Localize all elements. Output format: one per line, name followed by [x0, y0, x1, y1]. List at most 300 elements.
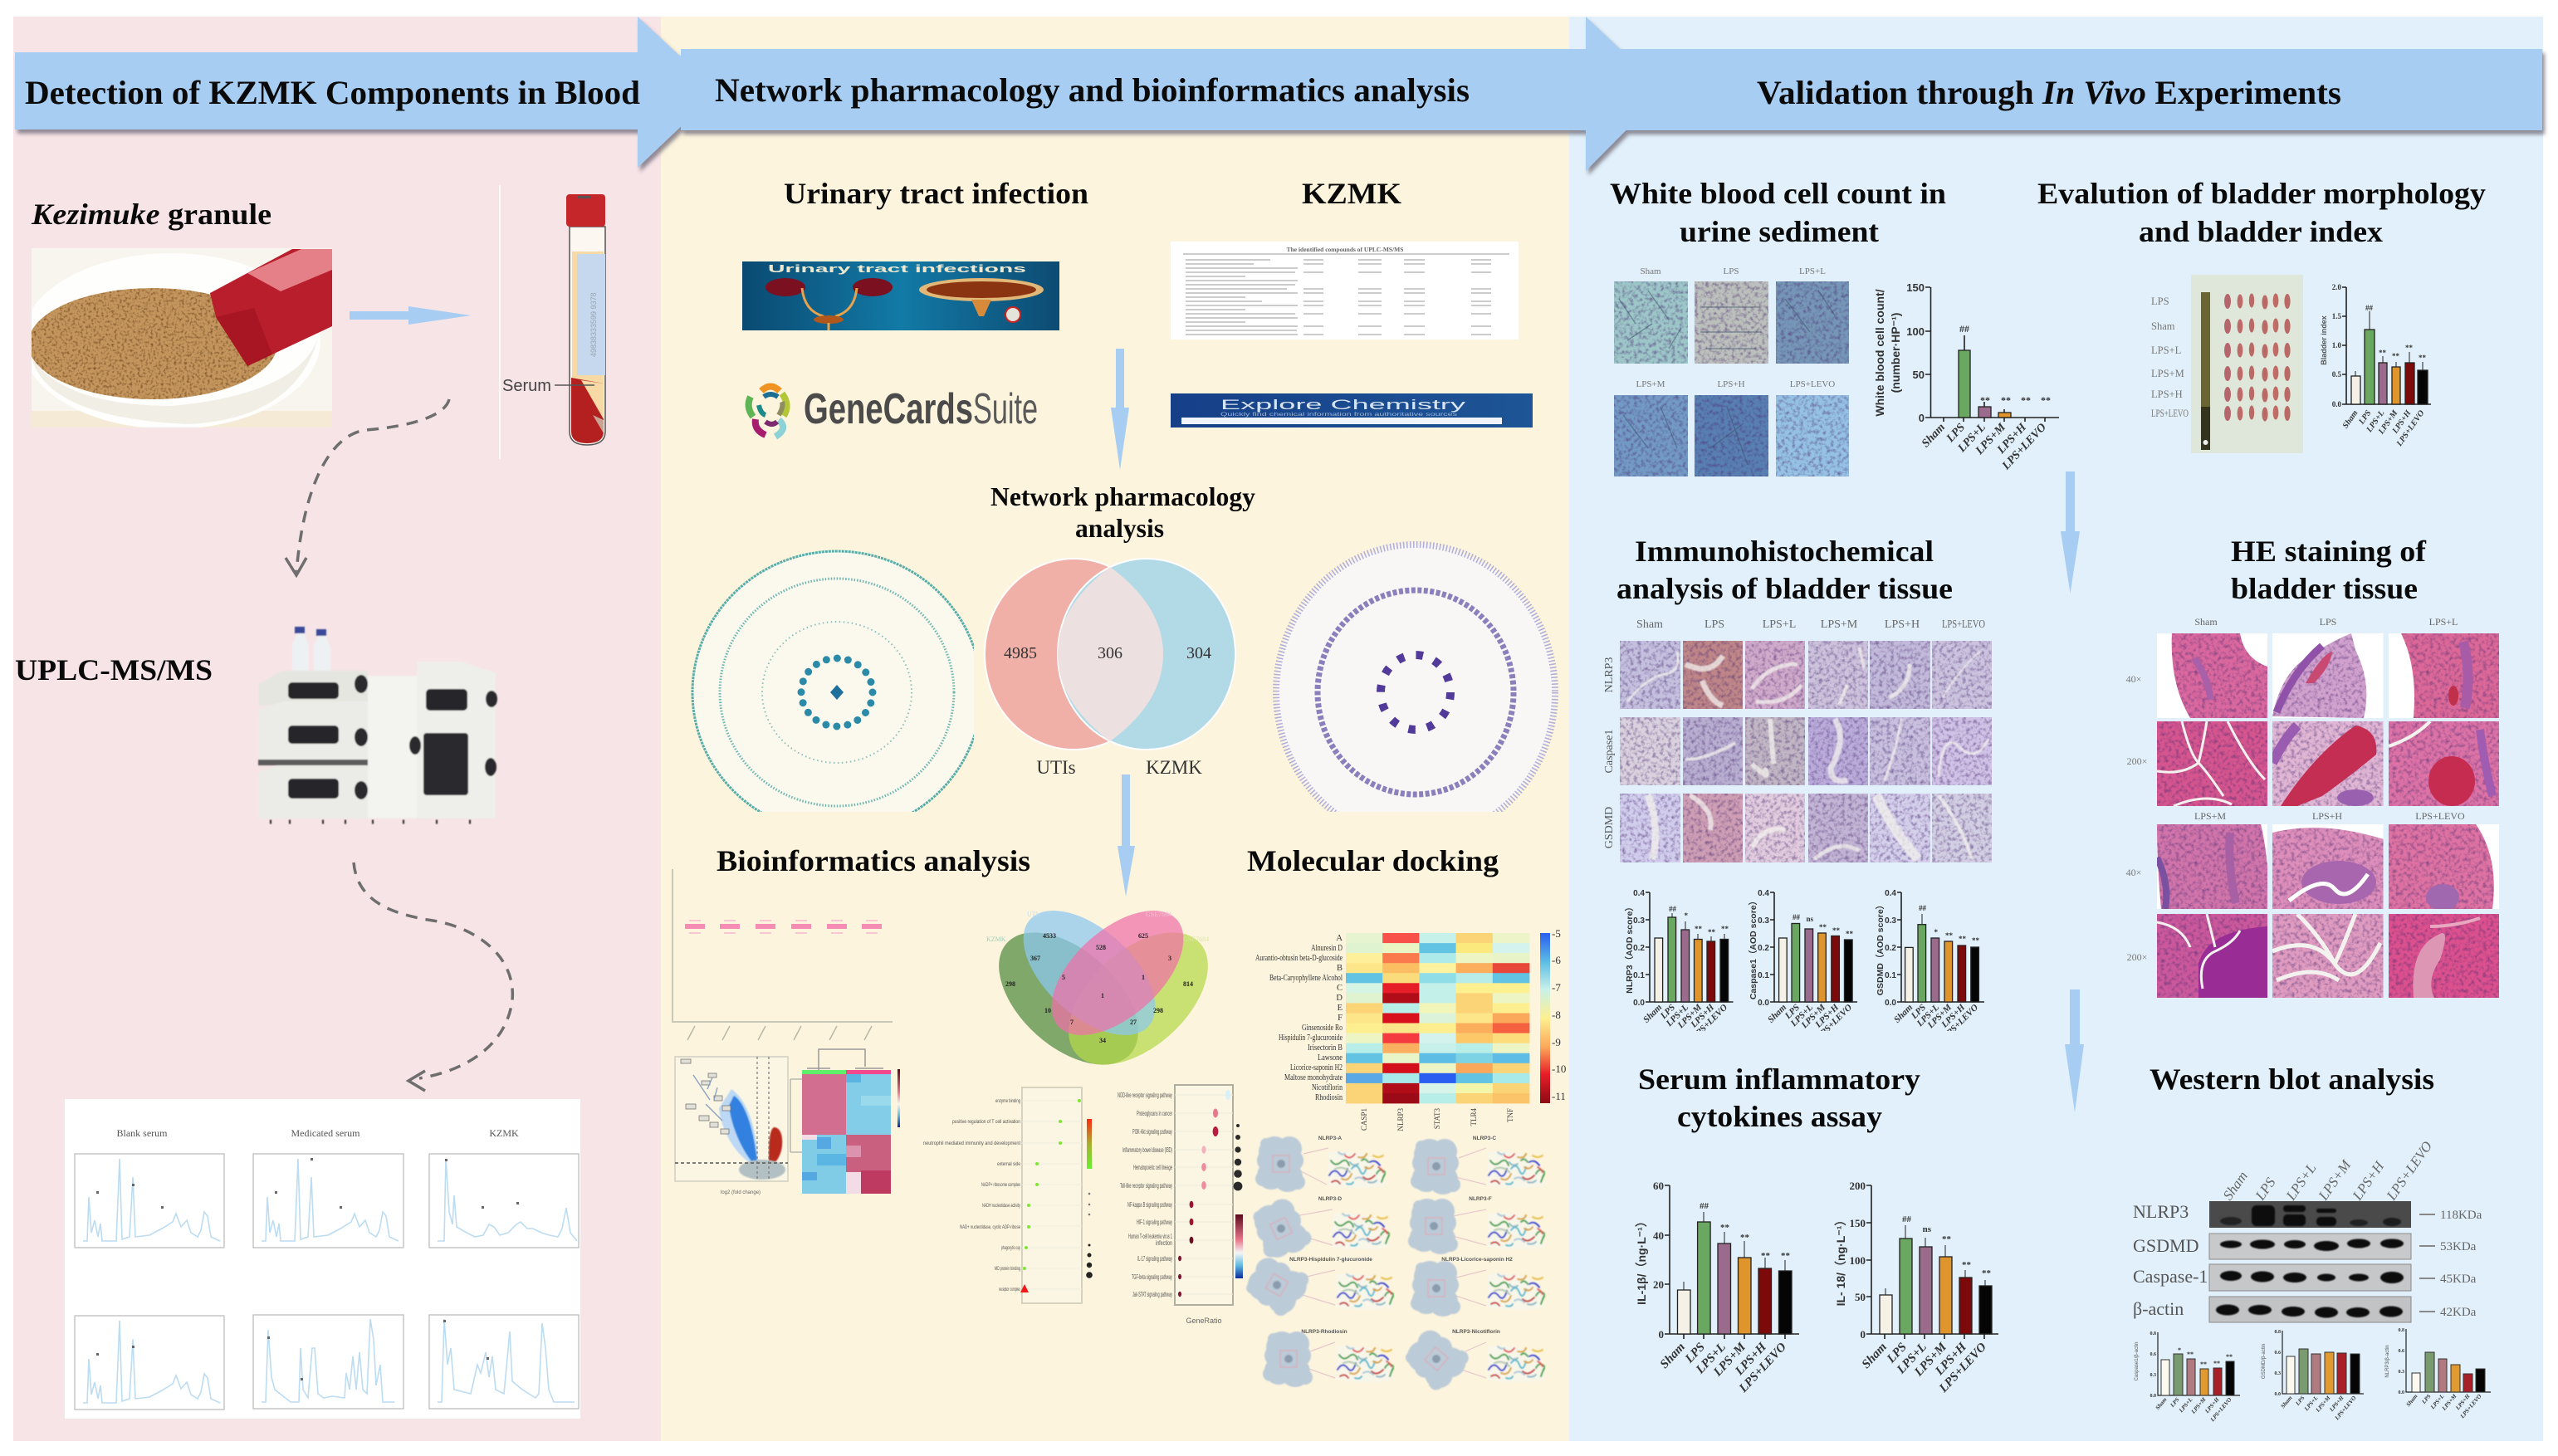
chart: IL-18 concentration: LPS+M — [1911, 1340, 1949, 1380]
chart: Caspase1 AOD score: ## — [1793, 913, 1800, 921]
chart: GSDMD AOD score: * — [1934, 928, 1938, 936]
chart: molecular docking binding energy heatmap: -7 — [1552, 981, 1561, 994]
chart: KEGG enrichment dot plot: Human T-cell leukemia virus 1 — [1128, 1232, 1172, 1240]
micrograph grid: HE staining: 200× — [2127, 951, 2147, 963]
chart: KEGG enrichment dot plot: NF-kappa B signaling pathway — [1127, 1200, 1172, 1209]
chart: NLRP3 AOD score: 0.1 — [1633, 971, 1645, 980]
micrograph grid: immunohistochemistry: LPS+L — [1763, 618, 1796, 631]
chart: molecular docking binding energy heatmap: Lawsone — [1318, 1053, 1343, 1063]
chart: differential expression heatmap — [790, 1049, 900, 1194]
chart: molecular docking binding energy heatmap: Alnuresin D — [1311, 944, 1343, 953]
micrograph grid: immunohistochemistry: LPS — [1705, 618, 1724, 631]
figure: western blot bands: 42KDa — [2440, 1306, 2477, 1319]
venn diagram: four-set overlap: 5 — [1062, 974, 1065, 981]
chart: bladder index bars: LPS+L — [2365, 408, 2386, 435]
venn diagram: four-set overlap: GSE7684 — [1183, 936, 1209, 943]
chart: IL-18 concentration: LPS+LEVO — [1936, 1341, 1989, 1395]
chart: IL-1β concentration: Sham — [1658, 1341, 1688, 1371]
chart: KEGG enrichment dot plot: Hematopoietic cell lineage — [1133, 1163, 1172, 1171]
micrographs: urine sediment — [1614, 266, 1849, 476]
chart: molecular docking binding energy heatmap: Aurantio-obtusin beta-D-glucoside — [1255, 954, 1343, 963]
image: urinary tract infections poster: Urinary tract infections — [768, 262, 1026, 275]
chart: western blot quantification, GSDMD: 0.8 — [2275, 1330, 2281, 1335]
chart: white blood cell count bars: LPS+LEVO — [1999, 421, 2049, 473]
chromatogram title: blank serum: Blank serum — [116, 1127, 168, 1139]
title: detection of KZMK components: Detection of KZMK Components in Blood — [25, 74, 640, 111]
chart: bladder index bars: 2.0 — [2332, 283, 2341, 291]
network: left teal concentric compound-target graph — [691, 550, 974, 812]
heading: HE staining: bladder tissue — [2231, 572, 2418, 605]
chart: western blot quantification, GSDMD: LPS — [2294, 1395, 2306, 1408]
image: table of identified compounds — [1171, 242, 1519, 340]
chart: bladder index bars: LPS+LEVO — [2394, 408, 2426, 449]
heading: serum inflammatory cytokines assay: cytokines assay — [1677, 1100, 1882, 1133]
image: table of identified compounds: The identified compounds of UPLC-MS/MS — [1287, 246, 1403, 253]
venn diagram: four-set overlap: 1 — [1142, 974, 1145, 981]
venn diagram: four-set overlap: 34 — [1099, 1037, 1106, 1044]
heading: KZMK: KZMK — [1302, 177, 1401, 210]
chart: IL-18 concentration: Sham — [1860, 1341, 1890, 1371]
chart: IL-18 concentration: LPS+H — [1933, 1340, 1970, 1379]
micrograph grid: immunohistochemistry: Sham — [1636, 618, 1663, 631]
micrograph grid: HE staining: LPS — [2320, 616, 2336, 628]
chart: western blot quantification, NLRP3 — [2385, 1328, 2491, 1420]
chart: molecular docking binding energy heatmap: -8 — [1552, 1009, 1561, 1021]
chart: IL-18 concentration: ## — [1902, 1214, 1911, 1224]
header arrows — [15, 17, 2545, 175]
chart: NLRP3 AOD score — [1624, 889, 1734, 1008]
venn diagram: four-set overlap: 367 — [1030, 955, 1040, 962]
chart: western blot quantification, GSDMD: LPS+H — [2328, 1395, 2345, 1414]
chart: GSDMD AOD score: ** — [1959, 935, 1966, 943]
axis labels: IHC group names: LPS+H — [1689, 1002, 1716, 1030]
chart: Caspase1 AOD score — [1748, 889, 1857, 1008]
chart: NLRP3 AOD score: 0.0 — [1633, 999, 1645, 1008]
heading: molecular docking: Molecular docking — [1247, 844, 1499, 877]
venn diagram: four-set overlap: 298 — [1153, 1007, 1163, 1014]
chart: western blot quantification, GSDMD: LPS+M — [2314, 1395, 2332, 1414]
axis labels: IHC group names: LPS+LEVO — [1814, 1003, 1854, 1043]
chart: western blot quantification, Caspase-1: LPS — [2169, 1396, 2181, 1410]
chart: normalized expression box plot — [673, 869, 893, 1040]
arrow: down from top row of validation — [2061, 471, 2080, 594]
chart: white blood cell count bars: Sham — [1920, 421, 1948, 450]
heading: immunohistochemical analysis — [1616, 535, 1953, 605]
chart: white blood cell count bars: LPS+M — [1973, 421, 2008, 458]
chart: Caspase1 AOD score: ** — [1819, 923, 1827, 931]
chart: NLRP3 AOD score: ** — [1708, 928, 1715, 936]
chart: western blot quantification, NLRP3: 0.6 — [2398, 1349, 2404, 1354]
chart: NLRP3 AOD score: ** — [1721, 925, 1729, 933]
chart: bladder index bars: LPS+M — [2376, 408, 2400, 437]
chart: NLRP3 AOD score: 0.3 — [1633, 916, 1645, 926]
chart: IL-18 concentration: ** — [1962, 1260, 1971, 1270]
chart: KEGG enrichment dot plot: Toll-like receptor signaling pathway — [1120, 1181, 1172, 1190]
chart: western blot quantification, NLRP3: 0.8 — [2398, 1328, 2404, 1333]
chart: western blot quantification, Caspase-1: * — [2178, 1346, 2181, 1354]
chart: GSDMD AOD score: 0.3 — [1885, 916, 1896, 926]
image: explore chemistry banner — [1171, 393, 1533, 428]
chart: white blood cell count bars: ** — [2041, 394, 2051, 406]
chart: molecular docking binding energy heatmap: -11 — [1552, 1090, 1566, 1102]
chart: western blot quantification, GSDMD: 0.6 — [2275, 1351, 2281, 1356]
figure: western blot bands: 53KDa — [2440, 1240, 2477, 1253]
arrow: down to bottom row of validation — [2065, 989, 2084, 1112]
chart: western blot quantification, Caspase-1: Sham — [2154, 1396, 2169, 1411]
chart: NLRP3 AOD score: 0.4 — [1633, 889, 1645, 898]
axis labels: IHC group names: Sham — [1892, 1002, 1915, 1025]
axis labels: IHC group names: Sham — [1766, 1002, 1788, 1025]
venn diagram: four-set overlap: 4533 — [1043, 932, 1056, 940]
chart: western blot quantification, GSDMD: GSDMD/β-actin — [2262, 1344, 2267, 1379]
chart: white blood cell count bars: LPS+H — [1994, 421, 2030, 457]
chart group: chromatograms — [65, 1099, 580, 1419]
chart: KEGG enrichment dot plot: Jak-STAT signaling pathway — [1132, 1290, 1172, 1298]
image: explore chemistry banner: Explore Chemistry — [1220, 397, 1466, 413]
network: right purple concentric compound-target graph — [1273, 541, 1558, 812]
heading: serum inflammatory cytokines assay: Serum inflammatory — [1638, 1063, 1920, 1096]
chart: molecular docking binding energy heatmap: Licorice-saponin H2 — [1290, 1063, 1343, 1072]
chart: western blot quantification, Caspase-1: ** — [2213, 1360, 2220, 1367]
venn diagram: UTIs and KZMK — [985, 559, 1235, 778]
heading: bioinformatics analysis: Bioinformatics analysis — [717, 844, 1030, 877]
photo: excised bladder specimens: LPS+LEVO — [2151, 408, 2189, 419]
chart: white blood cell count bars: (number·HP⁻¹) — [1889, 313, 1902, 393]
chart: GSDMD AOD score: 0.4 — [1885, 889, 1896, 898]
axis labels: IHC group names: LPS+H — [1939, 1002, 1967, 1030]
chart: KEGG enrichment dot plot: NOD-like receptor signaling pathway — [1118, 1091, 1172, 1099]
chart: GO enrichment dot plot: phagocytic cup — [1001, 1245, 1020, 1251]
micrograph grid: HE staining: 200× — [2127, 755, 2147, 767]
figure: western blot bands: β-actin — [2133, 1298, 2184, 1319]
micrographs: urine sediment: LPS+L — [1799, 266, 1826, 276]
chart: white blood cell count bars: 0 — [1919, 412, 1925, 424]
chart: molecular docking binding energy heatmap: Nicotiflorin — [1312, 1083, 1343, 1092]
chart: bladder index bars: Bladder index — [2320, 315, 2328, 365]
venn diagram: four-set overlap: 1 — [1101, 992, 1104, 999]
chart: molecular docking binding energy heatmap: Maltose monohydrate — [1284, 1073, 1343, 1082]
heading: network pharmacology analysis — [990, 481, 1255, 543]
chart: IL-18 concentration: 50 — [1855, 1291, 1866, 1303]
chart: molecular docking binding energy heatmap: A — [1336, 934, 1343, 943]
chart: western blot quantification, Caspase-1: LPS+H — [2203, 1396, 2221, 1415]
chart: bladder index bars: 0.5 — [2332, 370, 2341, 379]
chart: KEGG enrichment dot plot: TGF-beta signaling pathway — [1132, 1273, 1172, 1281]
chart: Caspase1 AOD score: 0.0 — [1758, 999, 1769, 1008]
axis labels: IHC group names: LPS+L — [1915, 1002, 1941, 1029]
venn diagram: four-set overlap: UTIs — [1027, 911, 1040, 918]
figure: western blot bands: Caspase-1 — [2133, 1266, 2208, 1287]
venn diagram: four-set overlap: 298 — [1005, 980, 1015, 988]
chart: KEGG enrichment dot plot — [1118, 1085, 1243, 1325]
axis labels: IHC group names: LPS+M — [1799, 1002, 1828, 1031]
micrograph grid: HE staining: 40× — [2126, 673, 2141, 685]
micrograph grid: immunohistochemistry — [1603, 618, 1992, 862]
chart: IL-1β concentration: 40 — [1653, 1229, 1664, 1242]
heading: bladder morphology and index: Evalution of bladder morphology — [2037, 177, 2486, 210]
micrograph grid: immunohistochemistry: Caspase1 — [1603, 730, 1616, 773]
venn diagram: four-set overlap: GSE7684 — [1146, 911, 1171, 918]
chart: white blood cell count bars: ## — [1959, 323, 1969, 335]
chart: white blood cell count bars: ** — [1980, 394, 1990, 406]
venn diagram: four-set overlap: 10 — [1044, 1007, 1051, 1014]
chart: GSDMD AOD score: ## — [1919, 904, 1926, 912]
figure: western blot bands — [2133, 1138, 2482, 1322]
venn diagram: four-set overlap: 528 — [1096, 944, 1106, 951]
chart: western blot quantification, Caspase-1 — [2135, 1331, 2240, 1424]
venn diagram: four-set overlap — [975, 887, 1232, 1090]
figure group: NLRP3 docking poses: NLRP3-Licorice-saponin H2 — [1441, 1257, 1513, 1263]
chart: IL-18 concentration: LPS — [1884, 1341, 1910, 1366]
venn diagram: four-set overlap: KZMK — [986, 936, 1006, 943]
chart: molecular docking binding energy heatmap: Beta-Caryophyllene Alcohol — [1269, 974, 1343, 983]
axis labels: IHC group names: LPS — [1783, 1003, 1802, 1022]
figure: western blot bands: LPS+H — [2349, 1157, 2388, 1204]
chart: GO enrichment dot plot: external side — [997, 1161, 1020, 1167]
axis labels: IHC group names: Sham — [1641, 1002, 1664, 1025]
venn diagram: four-set overlap: 3 — [1168, 955, 1171, 962]
arrow: dashed, tube to UPLC — [286, 399, 449, 575]
chart: western blot quantification, Caspase-1: ** — [2187, 1351, 2194, 1358]
heading: serum inflammatory cytokines assay — [1638, 1063, 1920, 1133]
heading: network pharmacology analysis: Network pharmacology — [990, 481, 1255, 511]
chart: Caspase1 AOD score: 0.3 — [1758, 916, 1769, 926]
chart: bladder index bars: Sham — [2341, 408, 2360, 430]
figure: western blot bands: GSDMD — [2133, 1235, 2199, 1256]
chart: western blot quantification, NLRP3: Sham — [2405, 1393, 2419, 1408]
chart: white blood cell count bars: LPS+L — [1955, 421, 1988, 456]
chart: molecular docking binding energy heatmap: CASP1 — [1360, 1108, 1368, 1131]
chart: molecular docking binding energy heatmap: Irisectorin B — [1308, 1043, 1343, 1053]
chart: KEGG enrichment dot plot: Proteoglycans in cancer — [1137, 1109, 1172, 1117]
venn diagram: four-set overlap: 27 — [1130, 1019, 1137, 1026]
chart: Caspase1 AOD score: ns — [1806, 915, 1813, 923]
axis labels: IHC group names: LPS+L — [1664, 1002, 1690, 1029]
chart: IL-1β concentration: ** — [1740, 1233, 1750, 1243]
figure: western blot bands: 118KDa — [2440, 1209, 2482, 1222]
arrow: dashed, UPLC to chromatograms — [354, 862, 512, 1091]
venn diagram: UTIs and KZMK: UTIs — [1036, 757, 1076, 778]
chart: molecular docking binding energy heatmap: Ginsenoside Ro — [1302, 1024, 1343, 1033]
panel: blood component detection background — [13, 17, 661, 1441]
illustration: UPLC-MS/MS instrument — [258, 627, 497, 822]
chart: bladder index bars: LPS+H — [2390, 408, 2414, 436]
chart: IL-1β concentration: 60 — [1653, 1180, 1664, 1192]
chart: western blot quantification, NLRP3: LPS+L — [2428, 1393, 2446, 1411]
chart: Caspase1 AOD score: ** — [1832, 926, 1840, 935]
heading: white blood cell count: White blood cell count in — [1610, 177, 1946, 210]
micrographs: urine sediment: LPS+H — [1717, 379, 1745, 389]
icon: blood collection tube with serum label — [499, 185, 605, 459]
figure: western blot bands: LPS+M — [2315, 1156, 2355, 1204]
heading: HE staining: HE staining of — [2231, 535, 2427, 568]
chart: western blot quantification, Caspase-1: 0.6 — [2150, 1352, 2156, 1357]
chart: IL-1β concentration: IL-1β/（ng·L⁻¹） — [1635, 1215, 1648, 1305]
chart: IL-1β concentration: 20 — [1653, 1278, 1664, 1291]
micrograph grid: immunohistochemistry: LPS+M — [1821, 618, 1858, 631]
chart: molecular docking binding energy heatmap: F — [1338, 1014, 1343, 1023]
chart: molecular docking binding energy heatmap: D — [1336, 994, 1343, 1003]
chart: molecular docking binding energy heatmap: Hispidulin 7-glucuronide — [1279, 1033, 1343, 1043]
chart: GO enrichment dot plot: NAD+ nucleotidase, cyclic ADP-ribose — [960, 1224, 1020, 1230]
micrograph grid: immunohistochemistry: LPS+LEVO — [1942, 618, 1985, 631]
chart: IL-1β concentration: LPS+H — [1733, 1340, 1770, 1379]
chart: bladder index bars: 1.5 — [2332, 312, 2341, 320]
chart: bladder index bars — [2320, 283, 2431, 449]
chart: white blood cell count bars: LPS — [1944, 421, 1968, 446]
chart: GSDMD AOD score: 0.0 — [1885, 999, 1896, 1008]
chart: NLRP3 AOD score: ** — [1695, 925, 1702, 933]
heading: Kezimuke granule: Kezimuke granule — [31, 198, 271, 231]
chart: western blot quantification, Caspase-1: ** — [2200, 1361, 2207, 1368]
icon: blood collection tube with serum label: 49838333599 9378 — [589, 292, 598, 357]
chart: IL-18 concentration: ** — [1982, 1268, 1991, 1278]
chart: western blot quantification, GSDMD: 0.3 — [2275, 1371, 2281, 1376]
chart: NLRP3 AOD score: ## — [1669, 905, 1677, 913]
figure group: NLRP3 docking poses — [1240, 1136, 1544, 1397]
venn diagram: UTIs and KZMK: 4985 — [1004, 644, 1037, 662]
figure: western blot bands: LPS+L — [2282, 1160, 2320, 1204]
chart: GSDMD AOD score: 0.1 — [1885, 971, 1896, 980]
chart: bladder index bars: ** — [2419, 354, 2426, 362]
axis labels: IHC group names: LPS+L — [1788, 1002, 1815, 1029]
chart: bladder index bars: ** — [2405, 344, 2413, 352]
heading: urinary tract infection: Urinary tract infection — [784, 177, 1088, 210]
arrow: down to bioinformatics and docking — [1118, 774, 1135, 897]
chart: IL-1β concentration: ## — [1700, 1201, 1709, 1211]
venn diagram: four-set overlap: 814 — [1183, 980, 1193, 988]
chart: white blood cell count bars: ** — [2001, 394, 2011, 406]
chart: IL-18 concentration: LPS+L — [1894, 1341, 1930, 1377]
micrograph grid: immunohistochemistry: GSDMD — [1603, 807, 1616, 848]
chart: bladder index bars: ** — [2379, 349, 2386, 357]
chart: Caspase1 AOD score: 0.4 — [1758, 889, 1769, 898]
chart: white blood cell count bars: 50 — [1913, 369, 1925, 381]
figure group: NLRP3 docking poses: NLRP3-F — [1469, 1196, 1492, 1202]
chart: GO enrichment dot plot: neutrophil mediated immunity and development — [923, 1141, 1020, 1146]
chart: molecular docking binding energy heatmap: -10 — [1552, 1063, 1566, 1075]
chart: western blot quantification, Caspase-1: LPS+L — [2177, 1396, 2194, 1414]
chart: volcano plot: log2 (fold change) — [721, 1190, 761, 1195]
figure group: NLRP3 docking poses: NLRP3-A — [1318, 1136, 1342, 1141]
chart: molecular docking binding energy heatmap: -5 — [1552, 927, 1561, 940]
axis labels: IHC group names — [1644, 1003, 1978, 1031]
chart: western blot quantification, NLRP3: LPS+LEVO — [2458, 1393, 2483, 1420]
chart: white blood cell count bars: White blood cell count/ — [1873, 289, 1886, 417]
axis labels: IHC group names: LPS+H — [1813, 1002, 1841, 1030]
heading: bladder morphology and index: and bladder index — [2139, 215, 2383, 248]
chart: molecular docking binding energy heatmap: NLRP3 — [1396, 1108, 1405, 1131]
chart: Caspase1 AOD score: 0.2 — [1758, 944, 1769, 953]
micrograph grid: HE staining: LPS+H — [2312, 810, 2342, 822]
chart: GO enrichment dot plot: receptor complex — [999, 1287, 1020, 1292]
chart: bladder index bars: ## — [2365, 304, 2373, 312]
photo: excised bladder specimens: LPS+L — [2151, 344, 2181, 356]
chart: bladder index bars: ** — [2392, 352, 2399, 360]
venn diagram: UTIs and KZMK: 304 — [1186, 644, 1211, 662]
axis labels: IHC group names: LPS+M — [1925, 1002, 1954, 1031]
axis labels: IHC group names: LPS — [1909, 1003, 1928, 1022]
chart: KEGG enrichment dot plot: HIF-1 signaling pathway — [1137, 1218, 1172, 1226]
chart: western blot quantification, GSDMD: Sham — [2280, 1395, 2294, 1410]
axis labels: IHC group names: LPS+LEVO — [1940, 1003, 1980, 1043]
image: explore chemistry banner: Quickly find chemical information from authoritative sources — [1220, 413, 1457, 418]
heading: immunohistochemical analysis: Immunohistochemical — [1635, 535, 1934, 568]
chart: molecular docking binding energy heatmap — [1255, 927, 1566, 1131]
micrograph grid: HE staining — [2126, 616, 2499, 998]
chart: western blot quantification, Caspase-1: 0.0 — [2150, 1394, 2156, 1399]
venn diagram: UTIs and KZMK: 306 — [1098, 644, 1122, 662]
chart: western blot quantification, Caspase-1: 0.3 — [2150, 1373, 2156, 1378]
title: validation through in vivo experiments: Validation through In Vivo Experiments — [1757, 74, 2341, 111]
chart: white blood cell count bars: ** — [2021, 394, 2031, 406]
heading: immunohistochemical analysis: analysis of bladder tissue — [1616, 572, 1953, 605]
chromatogram title: KZMK: KZMK — [489, 1127, 519, 1139]
chart: NLRP3 AOD score: * — [1684, 911, 1689, 920]
chart: GO enrichment dot plot: enzyme binding — [995, 1098, 1020, 1104]
chart: IL-1β concentration: ** — [1761, 1251, 1770, 1261]
chart: bladder index bars: LPS — [2357, 408, 2374, 427]
venn diagram: four-set overlap: 7 — [1070, 1019, 1074, 1026]
chart: Caspase1 AOD score: 0.1 — [1758, 971, 1769, 980]
chart: GO enrichment dot plot: positive regulation of T cell activation — [952, 1119, 1020, 1125]
micrograph grid: immunohistochemistry: LPS+H — [1885, 618, 1920, 631]
chart: IL-18 concentration: ** — [1942, 1234, 1951, 1244]
photo: granules in a bowl with sachet — [32, 248, 332, 428]
chart: western blot quantification, GSDMD: 0.0 — [2275, 1392, 2281, 1397]
micrograph grid: immunohistochemistry: NLRP3 — [1603, 657, 1616, 692]
chart: western blot quantification, Caspase-1: 0.8 — [2150, 1331, 2156, 1336]
figure: western blot bands: 45KDa — [2440, 1273, 2477, 1286]
chart: western blot quantification, GSDMD — [2262, 1330, 2364, 1422]
chart: western blot quantification, NLRP3: 0.3 — [2398, 1370, 2404, 1375]
chart: bladder index bars: 1.0 — [2332, 341, 2341, 349]
chart: western blot quantification, Caspase-1: Caspase1/β-actin — [2135, 1342, 2140, 1380]
heading: UPLC-MS/MS: UPLC-MS/MS — [15, 653, 213, 686]
chart: NLRP3 AOD score: NLRP3（AOD score） — [1624, 902, 1635, 994]
chart: white blood cell count bars: 150 — [1906, 281, 1925, 294]
chart: KEGG enrichment dot plot: infection — [1156, 1239, 1172, 1247]
chart: molecular docking binding energy heatmap: -9 — [1552, 1036, 1561, 1048]
chart: IL-18 concentration: 150 — [1850, 1217, 1866, 1229]
chart: molecular docking binding energy heatmap: C — [1337, 984, 1343, 993]
chart: IL-18 concentration: ns — [1923, 1224, 1932, 1234]
chart: western blot quantification, NLRP3: LPS+M — [2440, 1393, 2458, 1412]
heading: western blot analysis: Western blot analysis — [2150, 1063, 2434, 1096]
chart: western blot quantification, GSDMD: LPS+L — [2302, 1395, 2320, 1413]
venn diagram: four-set overlap: 625 — [1138, 932, 1148, 940]
micrograph grid: HE staining: LPS+L — [2429, 616, 2458, 628]
logo: GeneCards Suite: GeneCards — [804, 385, 973, 433]
chart: molecular docking binding energy heatmap: STAT3 — [1433, 1108, 1441, 1129]
chart: Caspase1 AOD score: ** — [1846, 930, 1853, 938]
chart: western blot quantification, GSDMD: LPS+LEVO — [2333, 1395, 2358, 1422]
chart: GO enrichment dot plot: NADP+ ribosome complex — [981, 1182, 1020, 1188]
chart: western blot quantification, NLRP3: 0.0 — [2398, 1390, 2404, 1395]
axis labels: IHC group names: LPS — [1658, 1003, 1677, 1022]
heading: bladder morphology and index — [2037, 177, 2486, 248]
chromatogram title: medicated serum: Medicated serum — [291, 1127, 360, 1139]
chart: volcano plot — [675, 1057, 788, 1195]
chart: IL-1β concentration: LPS — [1682, 1341, 1708, 1366]
chart: GSDMD AOD score: ** — [1945, 931, 1953, 940]
chart: IL-1β concentration: LPS+L — [1693, 1341, 1729, 1377]
chart: IL-1β concentration — [1635, 1180, 1799, 1395]
figure: western blot bands: LPS — [2252, 1175, 2279, 1204]
photo: excised bladder specimens: LPS — [2151, 296, 2169, 307]
chart: GO enrichment dot plot: NADH nucleotidase activity — [982, 1203, 1020, 1209]
chart: GSDMD AOD score: ** — [1972, 936, 1979, 945]
